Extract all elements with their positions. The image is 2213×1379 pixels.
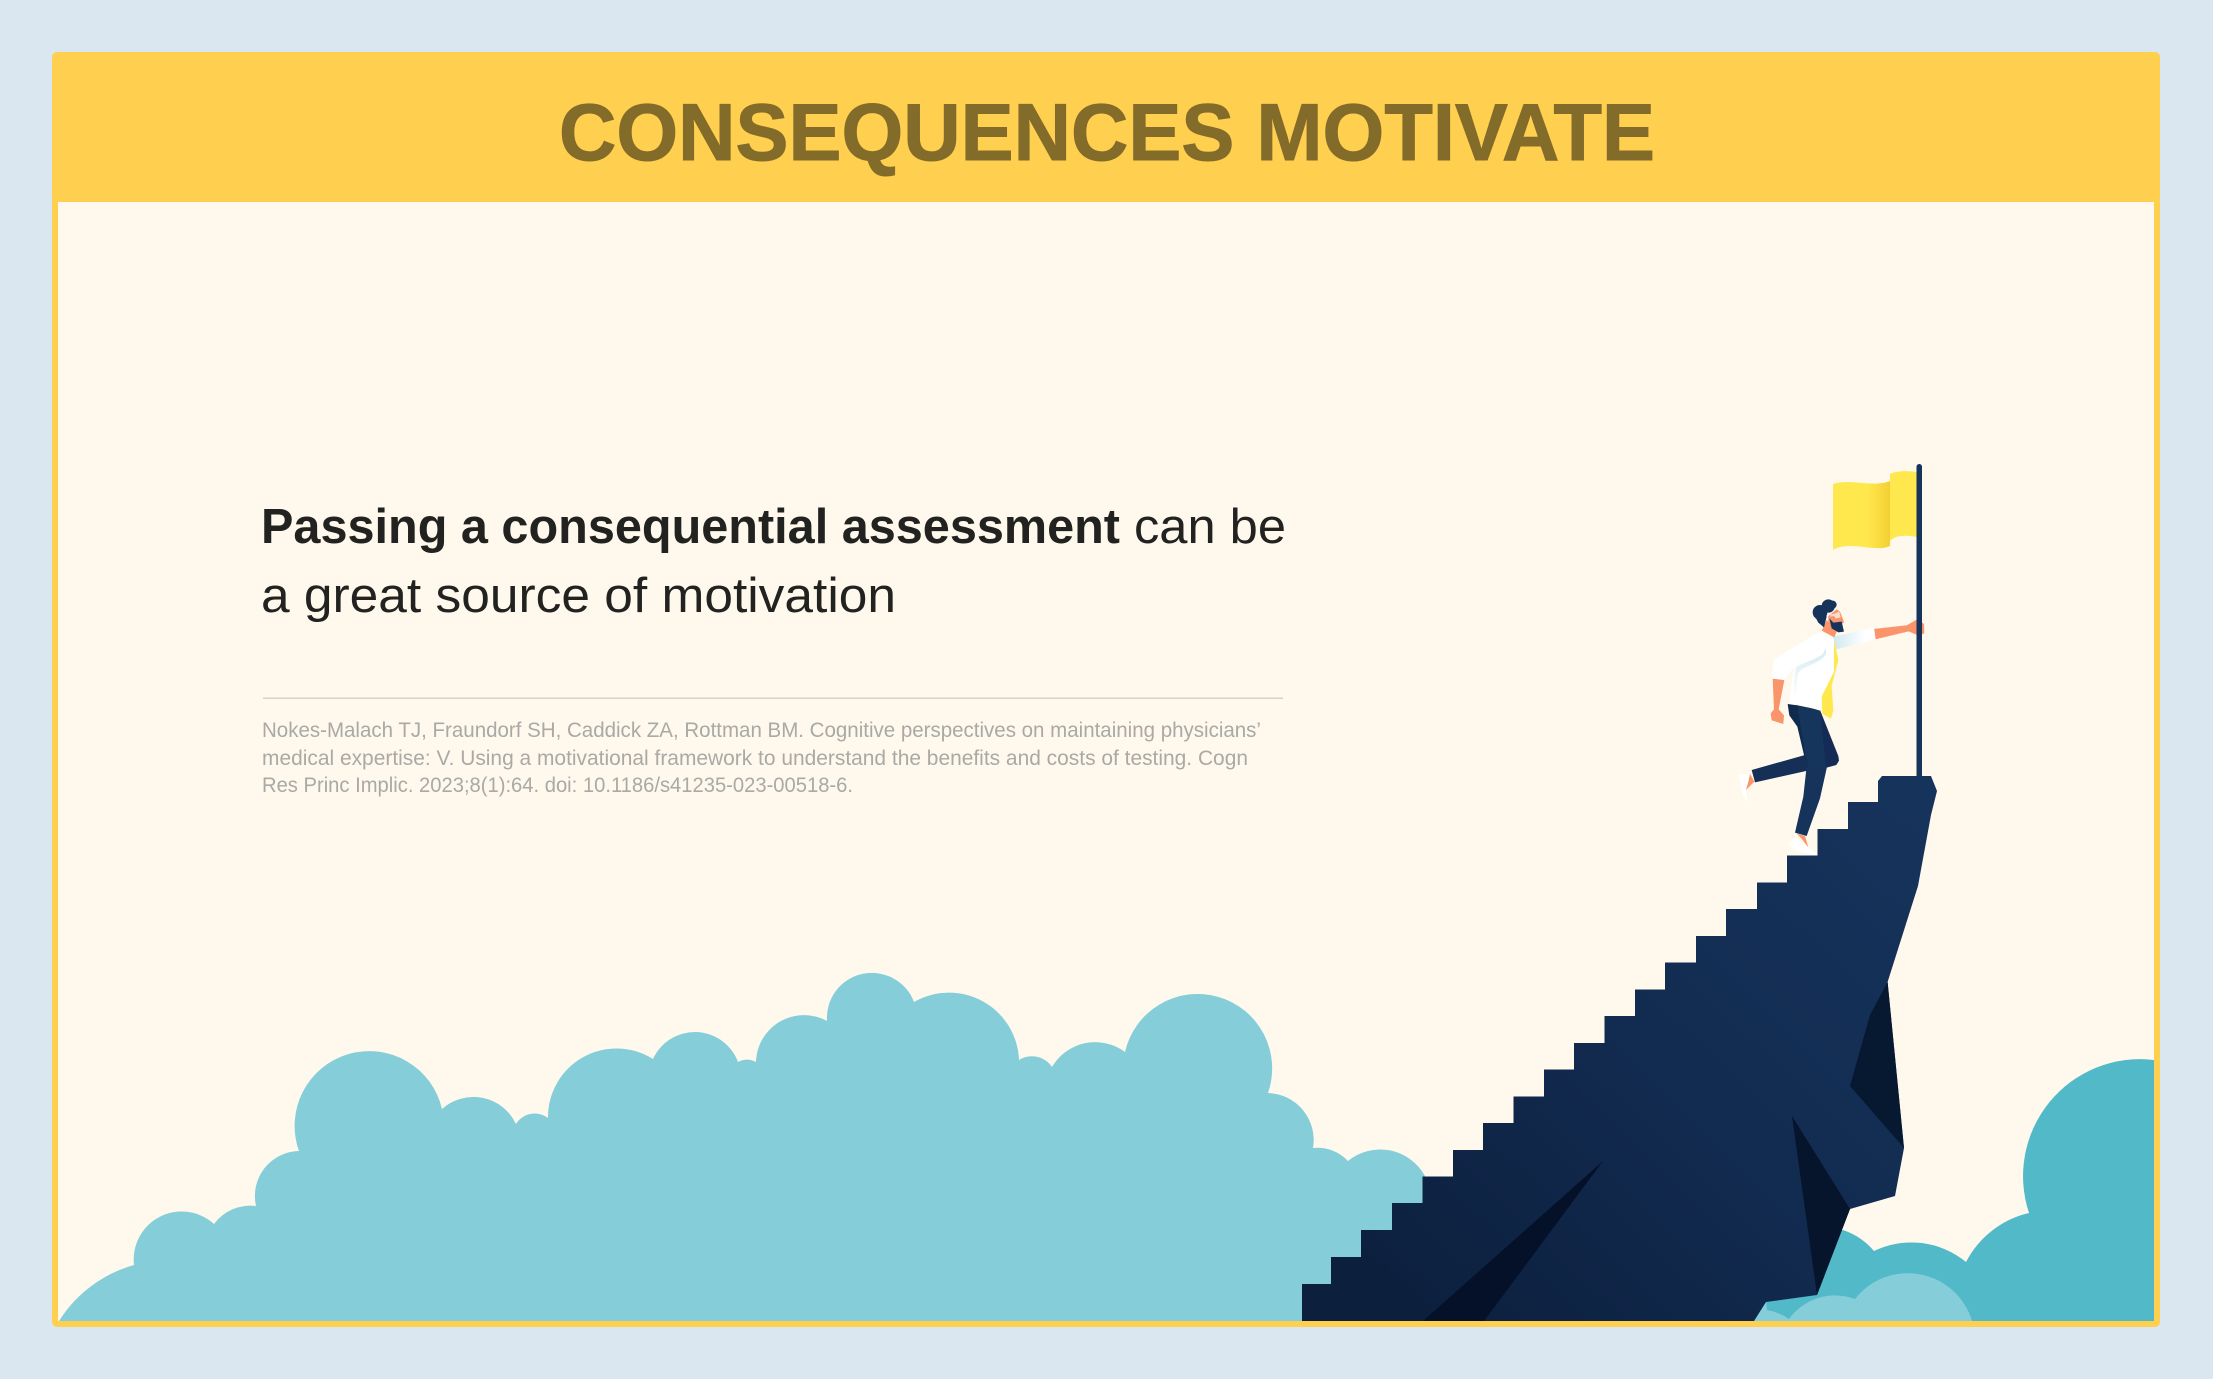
rock shadow facet upper bbox=[1850, 982, 1904, 1148]
rock shadow facet lower bbox=[1423, 1161, 1603, 1321]
main statement text: Passing a consequential assessment bbox=[261, 500, 1120, 554]
thigh right shading bbox=[1818, 709, 1839, 768]
rocky staircase mountain bbox=[1302, 776, 1937, 1321]
shirt body bbox=[1772, 631, 1834, 711]
rock shadow facet middle bbox=[1792, 1116, 1850, 1295]
front lower leg bbox=[1795, 760, 1827, 836]
trailing ankle bbox=[1746, 774, 1754, 790]
beard bbox=[1829, 618, 1844, 632]
main statement text: a great source of motivation bbox=[261, 569, 896, 623]
citation text: Res Princ Implic. 2023;8(1):64. doi: 10.1186/s41235-023-00518-6. bbox=[262, 773, 853, 797]
front ankle bbox=[1797, 833, 1808, 847]
tie bbox=[1822, 639, 1838, 719]
clouds: right teal bank bbox=[1745, 1059, 2154, 1321]
trailing shoe bbox=[1739, 774, 1749, 803]
rear thigh shading bbox=[1788, 704, 1808, 769]
reaching sleeve bbox=[1833, 628, 1876, 649]
front shoe bbox=[1788, 837, 1817, 855]
divider bbox=[263, 698, 1283, 699]
thigh bbox=[1796, 705, 1826, 769]
citation text bbox=[262, 718, 1261, 797]
trailing leg bbox=[1752, 755, 1813, 782]
face bbox=[1828, 609, 1844, 627]
man climbing the stairs bbox=[1739, 599, 1924, 855]
citation text: Nokes-Malach TJ, Fraundorf SH, Caddick ZA, Rottman BM. Cognitive perspectives on maintaining physicians’ bbox=[262, 718, 1261, 742]
flag bbox=[1833, 471, 1918, 550]
glasses bbox=[1830, 611, 1841, 619]
rock body with stairs bbox=[1302, 776, 1937, 1321]
neck bbox=[1822, 620, 1837, 637]
panel: cream content area bbox=[58, 202, 2154, 1321]
clouds: left light bank bbox=[59, 973, 1425, 1321]
left forearm bbox=[1771, 679, 1784, 724]
hair bbox=[1813, 599, 1837, 627]
clouds: small light foreground bbox=[1754, 1273, 1972, 1321]
flag pole bbox=[1916, 464, 1922, 778]
main statement text: can be bbox=[1134, 500, 1286, 554]
title: CONSEQUENCES MOTIVATE bbox=[559, 88, 1655, 178]
reaching forearm and hand bbox=[1873, 619, 1924, 639]
main statement text bbox=[261, 500, 1286, 623]
citation text: medical expertise: V. Using a motivational framework to understand the benefits and costs of testing. Cogn bbox=[262, 746, 1248, 770]
shirt fold bbox=[1793, 644, 1826, 697]
